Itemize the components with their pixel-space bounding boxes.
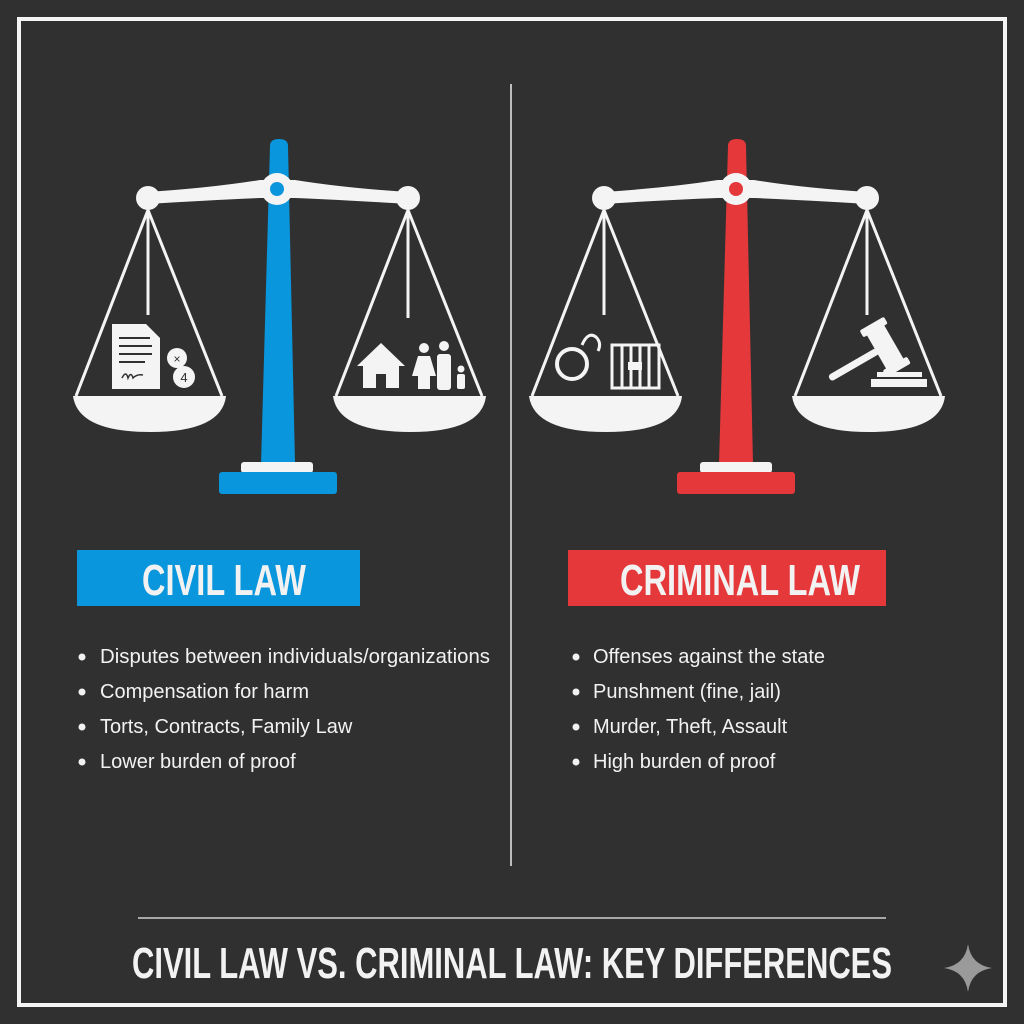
icon: gavel	[816, 317, 927, 402]
civil bullets: Torts, Contracts, Family Law	[100, 716, 353, 738]
criminal bullets	[572, 646, 825, 773]
civil bullets: Disputes between individuals/organizations	[100, 646, 490, 668]
icon: contract document: ×	[173, 352, 181, 366]
icon: sparkle	[944, 944, 992, 992]
icon: handcuffs and jail	[557, 335, 659, 388]
criminal bullets: Offenses against the state	[593, 646, 825, 668]
base	[241, 462, 313, 473]
criminal bullets: High burden of proof	[593, 751, 776, 773]
beam	[147, 180, 408, 204]
label: civil law: CIVIL LAW	[142, 556, 306, 605]
icon: house and family	[357, 341, 465, 390]
label: civil law	[77, 550, 360, 606]
beam	[603, 180, 868, 204]
civil bullets: Lower burden of proof	[100, 751, 296, 773]
pole	[719, 139, 753, 464]
icon: contract document: 4	[180, 370, 188, 385]
criminal bullets: Murder, Theft, Assault	[593, 716, 788, 738]
base	[700, 462, 772, 473]
pan strings	[76, 210, 482, 396]
civil bullets: Compensation for harm	[100, 681, 309, 703]
scale: criminal law	[529, 139, 945, 494]
label: criminal law: CRIMINAL LAW	[620, 556, 860, 605]
label: criminal law	[568, 550, 886, 606]
criminal bullets: Punshment (fine, jail)	[593, 681, 781, 703]
pole	[261, 139, 295, 464]
pan strings	[532, 210, 941, 396]
civil bullets	[78, 646, 490, 773]
icon: contract document	[112, 324, 195, 389]
scale: civil law	[73, 139, 486, 494]
